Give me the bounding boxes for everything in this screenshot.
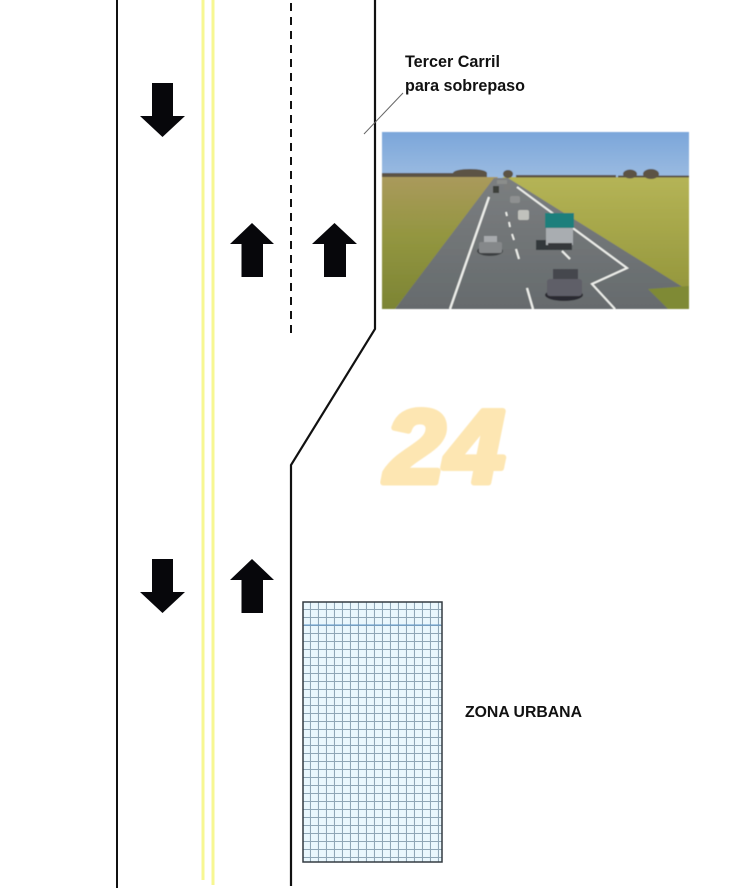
right field <box>502 177 689 309</box>
label: urban zone: ZONA URBANA <box>465 704 582 721</box>
left road edge line <box>116 0 118 888</box>
asphalt <box>395 178 689 309</box>
label: third lane: para sobrepaso <box>405 77 525 95</box>
grass corner <box>648 286 689 309</box>
arrow: northbound lane 1 upper <box>230 223 274 277</box>
arrow: northbound lower <box>230 559 274 613</box>
road markings <box>450 187 627 309</box>
yellow double centre line <box>203 0 213 885</box>
arrow: southbound lower <box>140 559 185 613</box>
truck <box>536 213 574 250</box>
label: third lane <box>405 53 525 95</box>
watermark number: 24 <box>383 390 505 506</box>
label: third lane: Tercer Carril <box>405 53 500 71</box>
photo: highway with third lane <box>382 132 689 309</box>
callout leader line <box>364 93 403 134</box>
right road edge with taper <box>291 0 375 886</box>
arrow: southbound upper <box>140 83 185 137</box>
arrow: northbound overtaking lane <box>312 223 357 277</box>
left field <box>382 177 498 309</box>
car: left grey <box>477 236 503 256</box>
urban zone grid <box>303 602 442 862</box>
car: front dark <box>545 269 583 301</box>
distant cars <box>493 180 529 220</box>
dashed lane divider <box>290 3 292 335</box>
treeline <box>382 169 689 179</box>
